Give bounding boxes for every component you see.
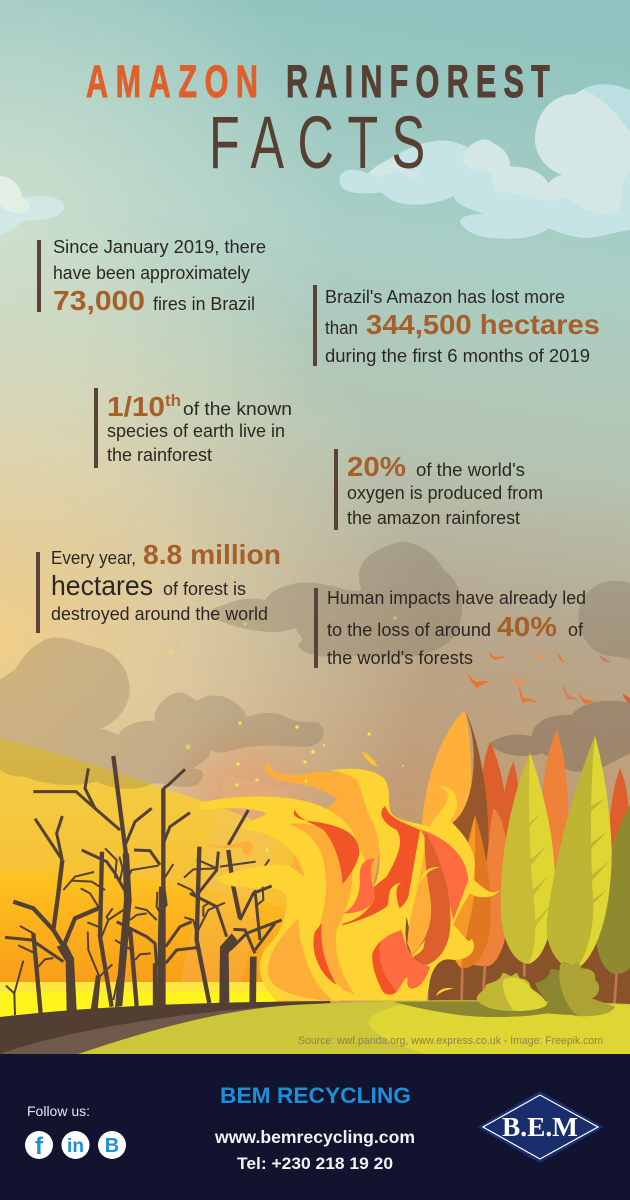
clouds: top right [340,84,630,239]
title line 1 brown word: RAINFOREST [286,57,550,108]
fact: 344,500 hectares: than [325,318,358,338]
bushes [477,962,615,1016]
icon: blogger [98,1131,126,1159]
fact: 8.8 million hectares [36,539,281,633]
icon: linkedin: in [67,1136,84,1157]
fact: 73,000 fires: 73,000 [53,285,145,316]
fact: 1/10th of species: the rainforest [107,445,212,465]
logo [477,1091,604,1163]
fact: 8.8 million hectares: destroyed around the world [51,604,268,624]
ground highlight and tree shadow [369,1001,630,1054]
footer [0,1054,630,1200]
smoke cloud: lower right [490,701,630,772]
birds [466,648,630,704]
fact: 344,500 hectares: during the first 6 months of 2019 [325,346,590,366]
fact: 40% of forests: the world's forests [327,648,473,668]
smoke cloud: lower left [0,637,324,789]
fact: 20% oxygen: oxygen is produced from [347,483,543,503]
icon: facebook [25,1131,53,1160]
fact: 40% of forests: Human impacts have already led [327,588,586,608]
fact: 8.8 million hectares: hectares [51,570,153,601]
fact: 8.8 million hectares: of forest is [163,579,246,599]
follow us label: Follow us: [27,1103,90,1119]
fact: 1/10th of species [94,388,292,468]
fact: 8.8 million hectares: Every year, [51,548,136,568]
sparks [143,574,404,852]
right tree line [406,711,630,1005]
smoke clouds: upper [210,542,630,660]
flame wisps over trees [207,841,300,887]
source credit: Source: wwf.panda.org, www.express.co.uk - Image: Freepik.com [298,1035,603,1047]
fact: 40% of forests [314,588,586,668]
clouds: left [0,176,64,235]
company name: BEM RECYCLING [220,1083,411,1108]
fact: 1/10th of species: 1/10 [107,391,165,422]
fact: 40% of forests: to the loss of around [327,620,491,640]
road [0,1001,340,1054]
fact: 1/10th of species: species of earth live in [107,421,285,441]
fact: 1/10th of species: of the known [183,399,292,419]
fact: 73,000 fires: fires in Brazil [153,294,255,314]
fire [200,752,500,1002]
fact: 20% oxygen: of the world's [416,460,525,480]
title line 1 orange word: AMAZON [86,57,258,108]
telephone: Tel: +230 218 19 20 [237,1154,393,1173]
fact: 344,500 hectares: Brazil's Amazon has lost more [325,287,565,307]
fact: 73,000 fires: have been approximately [53,263,250,283]
fact: 344,500 hectares: 344,500 hectares [366,309,600,340]
fact: 8.8 million hectares: 8.8 million [143,539,281,570]
fact: 20% oxygen: the amazon rainforest [347,508,520,528]
title line 2: FACTS [209,103,425,184]
icon: blogger: B [105,1135,119,1157]
fact: 1/10th of species: th [165,391,181,410]
icon: linkedin [62,1131,90,1159]
fact: 73,000 fires [37,237,266,316]
fact: 344,500 hectares [313,285,600,366]
logo: B.E.M [502,1112,578,1142]
fact: 73,000 fires: Since January 2019, there [53,237,266,257]
burnt trees [5,756,282,1015]
fact: 20% oxygen [334,449,543,530]
fact: 40% of forests: 40% [497,611,557,642]
hills [0,738,320,1022]
icon: facebook: f [35,1133,44,1160]
fact: 40% of forests: of [568,620,584,640]
title [86,57,550,184]
fact: 20% oxygen: 20% [347,451,406,482]
website: www.bemrecycling.com [214,1127,415,1147]
ground [78,1000,630,1054]
